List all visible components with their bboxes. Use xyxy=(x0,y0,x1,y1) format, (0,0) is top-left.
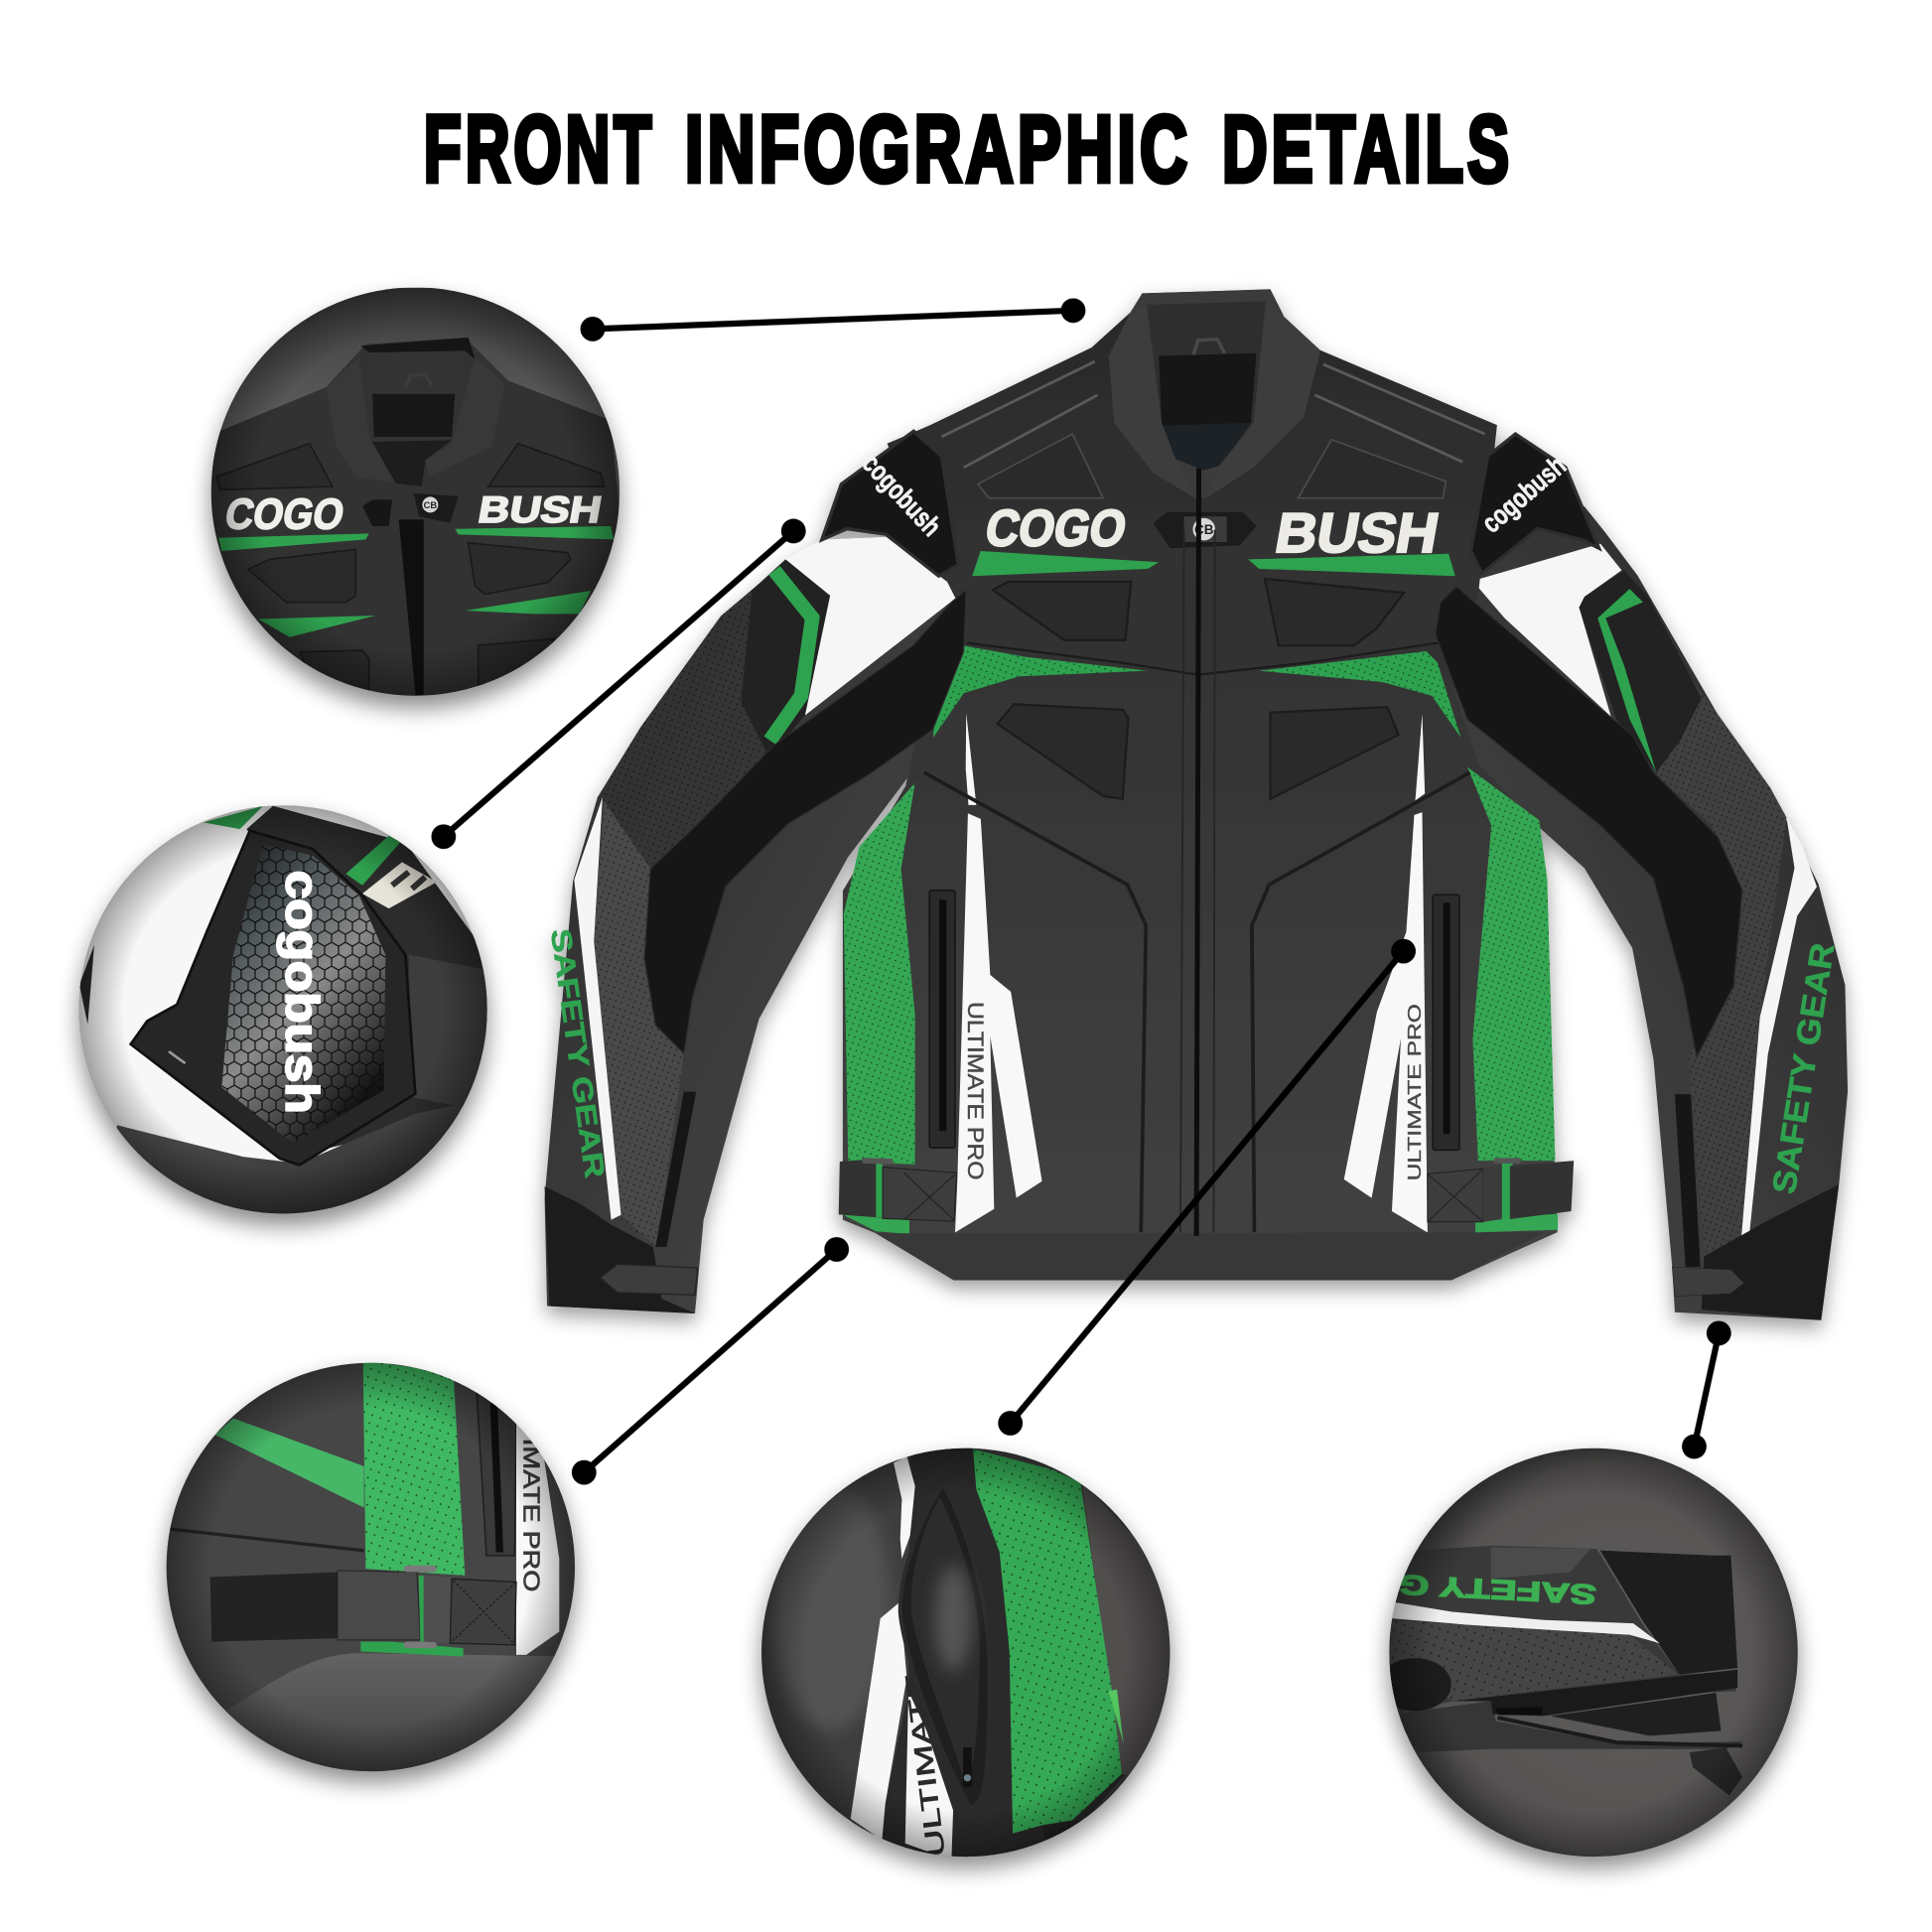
title: FRONT xyxy=(424,96,655,201)
green sleeve chevron left xyxy=(770,571,812,741)
green chest stripe left xyxy=(972,551,1159,576)
right cuff strap xyxy=(1672,1267,1744,1297)
collar lining xyxy=(1147,302,1266,465)
body seams and zipper xyxy=(924,469,1470,1236)
upper jacket details xyxy=(741,289,1599,799)
detail circle: collar and chest: CB xyxy=(424,500,437,510)
connector line: shoulder xyxy=(431,518,806,849)
COGO chest logo: COGO xyxy=(981,500,1131,557)
jacket illustration xyxy=(544,289,1848,1320)
lower jacket details xyxy=(839,713,1042,1234)
shoulder pad left xyxy=(822,431,958,576)
right sleeve text: SAFETY GEAR xyxy=(1766,940,1842,1196)
title: DETAILS xyxy=(1222,96,1513,201)
dark upper sleeve right xyxy=(1580,570,1702,772)
closeup SAFETY GEAR: SAFETY G xyxy=(1397,1569,1597,1610)
closeup green diagonal xyxy=(215,1418,364,1507)
right white graphic xyxy=(1344,812,1428,1232)
closeup green panel xyxy=(973,1449,1122,1834)
closeup chest logo fragment xyxy=(362,862,437,908)
shoulder logo right: cogobush xyxy=(1475,450,1572,539)
closeup neoprene cuff xyxy=(1600,1551,1737,1675)
jacket body xyxy=(843,290,1558,1280)
zipper tab logo xyxy=(1154,512,1256,548)
detail circle: sleeve cuff zipper xyxy=(1378,1440,1822,1876)
shoulder pad closeup xyxy=(131,831,415,1165)
connector line: cuff xyxy=(1682,1320,1731,1458)
closeup velcro tab xyxy=(1690,1747,1742,1795)
closeup green stripes xyxy=(204,806,263,829)
right lower jacket details xyxy=(1344,714,1574,1232)
left pocket xyxy=(929,891,955,1148)
green chest stripe right xyxy=(1248,554,1455,576)
dark upper sleeve left xyxy=(741,559,830,758)
connector line: collar xyxy=(581,298,1085,342)
right ULTIMATE PRO text: ULTIMATE PRO xyxy=(1404,1004,1425,1180)
BUSH chest logo: BUSH xyxy=(1271,501,1444,564)
hanger loop xyxy=(1193,340,1224,354)
left green side panel xyxy=(843,782,915,1234)
detail circle: waist strap xyxy=(159,1360,596,1797)
closeup zipper xyxy=(1452,1670,1737,1716)
closeup cuff lining xyxy=(1551,1693,1721,1735)
right sleeve perforated panel xyxy=(1637,608,1786,1257)
right cuff xyxy=(1702,1184,1839,1320)
hexagon surface xyxy=(221,844,385,1144)
closeup hem xyxy=(225,1653,554,1771)
neck mesh xyxy=(1162,423,1251,471)
closeup pocket xyxy=(900,1484,990,1807)
title: INFOGRAPHIC xyxy=(685,96,1191,201)
collar xyxy=(1109,289,1320,498)
closeup velcro xyxy=(210,1572,338,1641)
green chest panel left xyxy=(933,645,1148,738)
right green side panel xyxy=(1467,767,1558,1232)
closeup ULTIMATE: ULTIMATE xyxy=(900,1671,951,1859)
shoulder logo left: cogobush xyxy=(857,448,947,542)
hem band xyxy=(876,1232,1545,1280)
closeup white stripe xyxy=(516,1423,559,1655)
chest seam lines xyxy=(967,643,1438,675)
chest plates xyxy=(993,579,1404,799)
front zipper xyxy=(1196,469,1199,1236)
right stretch mesh xyxy=(1436,587,1742,1057)
left sleeve text: SAFETY GEAR xyxy=(544,927,611,1180)
closeup green panel xyxy=(363,1360,465,1576)
closeup upper leather xyxy=(1385,1546,1735,1715)
left sleeve white stripe xyxy=(574,797,621,1220)
right pocket xyxy=(1433,895,1459,1150)
closeup pocket xyxy=(477,1390,516,1556)
right sleeve zipper xyxy=(1675,1094,1701,1267)
right waist strap xyxy=(1428,1158,1574,1222)
closeup COGO: COGO xyxy=(221,490,347,539)
white shoulder panel left xyxy=(785,537,955,716)
cogobush logo: cogobush xyxy=(276,871,328,1114)
closeup white stripes xyxy=(894,1456,915,1559)
left sleeve xyxy=(544,540,961,1313)
connector line: waist strap xyxy=(572,1237,849,1484)
left sleeve zipper xyxy=(655,1092,696,1247)
shoulder pad right xyxy=(1471,434,1599,573)
closeup tab logo xyxy=(414,493,459,523)
green chest panel right xyxy=(1259,651,1460,738)
closeup lower leather xyxy=(1392,1701,1744,1752)
left sleeve lower perforated panel xyxy=(594,801,684,1247)
zipper tab logo: CB xyxy=(1194,522,1214,537)
closeup perforated leather xyxy=(1390,1620,1678,1701)
closeup stitched box xyxy=(450,1579,516,1645)
jacket closeup xyxy=(210,338,620,696)
right sleeve xyxy=(1425,501,1848,1320)
left ULTIMATE PRO text: ULTIMATE PRO xyxy=(963,1002,988,1180)
shoulder plates xyxy=(978,434,1446,498)
white shoulder panel right xyxy=(1472,544,1621,717)
detail circle: shoulder slider xyxy=(74,799,511,1236)
connector line: pocket xyxy=(998,939,1416,1436)
left stretch mesh xyxy=(644,590,966,1053)
detail circle: open pocket xyxy=(755,1440,1191,1876)
closeup zipper xyxy=(399,519,424,695)
shoulder seam lines xyxy=(941,361,1485,468)
closeup stripes xyxy=(218,533,369,551)
closeup ULTIMATE PRO: IMATE PRO xyxy=(518,1438,544,1591)
green sleeve chevron right xyxy=(1597,589,1656,772)
title xyxy=(424,96,1513,201)
right sleeve white stripe xyxy=(1741,818,1817,1238)
closeup dark panel xyxy=(881,1447,1125,1869)
left cuff xyxy=(545,1186,695,1313)
left waist strap xyxy=(839,1158,957,1221)
closeup white stripe xyxy=(1392,1601,1660,1643)
closeup BUSH: BUSH xyxy=(476,488,605,530)
detail circle: collar and chest xyxy=(204,287,640,725)
left cuff strap xyxy=(600,1264,697,1295)
left white graphic xyxy=(955,813,1042,1232)
